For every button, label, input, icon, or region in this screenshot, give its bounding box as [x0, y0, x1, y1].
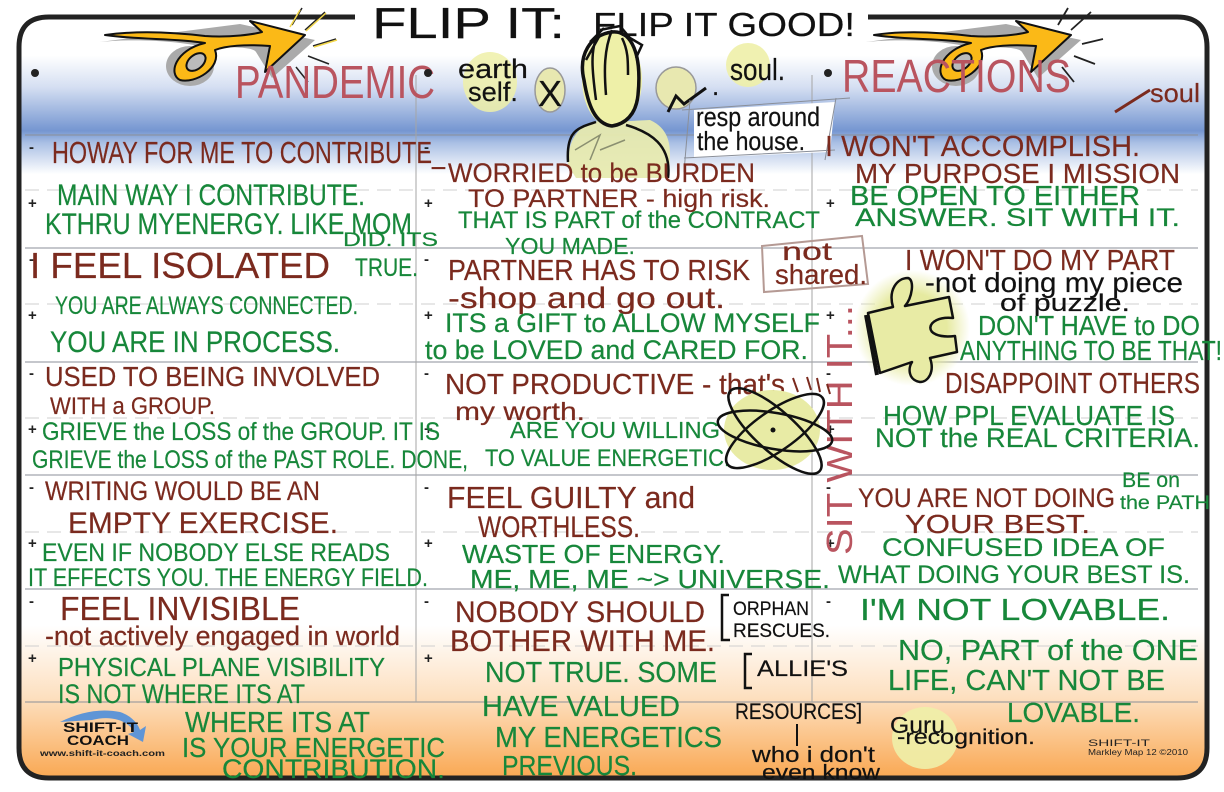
- credit: [1088, 738, 1189, 757]
- icon: puzzle piece: [854, 270, 970, 386]
- column two: middle notes: PREVIOUS.: [502, 750, 637, 781]
- column two: middle notes: ARE YOU WILLING: [510, 417, 720, 443]
- row markers: -: [826, 139, 831, 156]
- column two: middle notes: [425, 158, 830, 781]
- row markers: -: [424, 479, 429, 496]
- column two: middle notes: BOTHER WITH ME.: [450, 625, 715, 658]
- row markers: +: [28, 535, 37, 552]
- logo: shift-it coach: SHIFT-IT: [63, 719, 139, 735]
- column two: middle notes: YOU MADE.: [505, 233, 635, 259]
- column two: middle notes: TO PARTNER - high risk.: [468, 185, 770, 213]
- note: orphan rescues: [722, 595, 830, 642]
- icon: right yellow arrow: [866, 8, 1103, 86]
- note: guru recognition: -recognition.: [897, 726, 1035, 749]
- column one: pandemic notes: EVEN IF NOBODY ELSE READS: [42, 539, 390, 567]
- column one: pandemic notes: DID. ITS: [343, 230, 438, 251]
- note: rays above atom: [793, 377, 830, 394]
- column two: middle notes: -shop and go out.: [448, 282, 725, 315]
- column two: middle notes: NOT PRODUCTIVE - that's: [445, 369, 785, 401]
- column one: pandemic notes: IS YOUR ENERGETIC: [182, 732, 445, 763]
- column three: reactions notes: CONFUSED IDEA OF: [882, 534, 1165, 562]
- column one: pandemic notes: PHYSICAL PLANE VISIBILITY: [58, 652, 385, 682]
- column one: pandemic notes: WHERE ITS AT: [185, 707, 370, 739]
- column three: reactions notes: LIFE, CAN'T NOT BE: [888, 665, 1165, 697]
- note: resp around the house: [682, 98, 850, 172]
- row markers: +: [424, 421, 433, 438]
- title: FLIP IT GOOD!: [593, 6, 855, 43]
- row markers: -: [29, 251, 34, 268]
- column two: middle notes: NOBODY SHOULD: [455, 596, 705, 629]
- column three: reactions notes: the PATH: [1120, 493, 1210, 514]
- row markers: -: [424, 593, 429, 610]
- row markers: +: [424, 307, 433, 324]
- row markers: -: [826, 365, 831, 382]
- column two: middle notes: my worth.: [455, 398, 585, 426]
- column three: reactions notes: LOVABLE.: [1007, 697, 1140, 728]
- note: soul slash: [1115, 78, 1200, 112]
- row markers: -: [29, 593, 34, 610]
- column three: reactions notes: NO, PART of the ONE: [898, 635, 1198, 667]
- note: allies resources: RESOURCES]: [735, 699, 862, 724]
- row markers: -: [29, 139, 34, 156]
- column three: reactions notes: -not doing my piece: [925, 267, 1183, 298]
- note: guru recognition: [890, 707, 1035, 769]
- row markers: -: [424, 251, 429, 268]
- row markers: +: [424, 650, 433, 667]
- row markers: +: [424, 535, 433, 552]
- icon: left yellow arrow: [100, 8, 337, 86]
- row markers: +: [28, 307, 37, 324]
- column one: pandemic notes: WRITING WOULD BE AN: [45, 476, 320, 506]
- note: earth self: self.: [468, 77, 518, 107]
- column three: reactions notes: NOT the REAL CRITERIA.: [875, 423, 1200, 453]
- row markers: +: [28, 650, 37, 667]
- column three: reactions notes: I WON'T ACCOMPLISH.: [825, 131, 1140, 163]
- column one: pandemic notes: HOWAY FOR ME TO CONTRIBUTE_: [52, 135, 446, 170]
- column three: reactions notes: YOU ARE NOT DOING: [858, 483, 1115, 513]
- vertical note: sit with it: SIT WITH IT...: [819, 305, 860, 555]
- column three: reactions notes: BE on: [1122, 469, 1180, 492]
- row markers: -: [29, 365, 34, 382]
- note: soul check: [668, 52, 785, 112]
- column one: pandemic notes: [28, 135, 468, 784]
- column two: middle notes: to be LOVED and CARED FOR.: [425, 335, 808, 365]
- row markers: +: [826, 535, 835, 552]
- note: earth self: [458, 54, 562, 114]
- title: [372, 0, 855, 48]
- column one: pandemic notes: FEEL INVISIBLE: [60, 590, 300, 627]
- column bullets: [31, 69, 832, 77]
- column three: reactions notes: I'M NOT LOVABLE.: [860, 592, 1170, 627]
- note: earth self: earth: [458, 54, 528, 84]
- column two: middle notes: WORRIED to be BURDEN: [448, 158, 755, 188]
- note: guru recognition: Guru: [890, 712, 945, 738]
- row markers: -: [826, 593, 831, 610]
- note: not shared box: [762, 236, 868, 292]
- column one: pandemic notes: MAIN WAY I CONTRIBUTE.: [57, 179, 365, 212]
- column one: pandemic notes: -not actively engaged in world: [45, 621, 400, 651]
- column three: reactions notes: of puzzle.: [1000, 290, 1130, 317]
- row markers: +: [826, 307, 835, 324]
- column one: pandemic notes: USED TO BEING INVOLVED: [45, 361, 380, 392]
- credit: Markley Map 12 ©2010: [1088, 748, 1189, 757]
- icon: earth self and soul highlights: [463, 43, 770, 112]
- column one: pandemic notes: IT EFFECTS YOU. THE ENERGY FIELD.: [28, 564, 428, 592]
- row markers: -: [29, 479, 34, 496]
- column one: pandemic notes: EMPTY EXERCISE.: [68, 507, 338, 540]
- column two: middle notes: ITS a GIFT to ALLOW MYSELF: [445, 308, 820, 338]
- note: resp around the house: the house.: [697, 126, 805, 156]
- row markers: [28, 139, 835, 667]
- note: allies resources: ALLIE'S: [757, 656, 848, 681]
- column one: pandemic notes: GRIEVE the LOSS of the GROUP. IT IS: [42, 418, 440, 446]
- title: FLIP IT:: [372, 0, 565, 48]
- column two: middle notes: WORTHLESS.: [478, 511, 640, 544]
- column heading: pandemic: PANDEMIC: [235, 56, 435, 108]
- row markers: -: [826, 479, 831, 496]
- column three: reactions notes: HOW PPL EVALUATE IS: [883, 400, 1175, 431]
- row markers: +: [28, 195, 37, 212]
- column three: reactions notes: [825, 131, 1222, 728]
- column one: pandemic notes: I FEEL ISOLATED: [30, 245, 330, 286]
- logo: shift-it coach: COACH: [67, 732, 129, 748]
- note: earth self: X: [538, 73, 562, 114]
- icon: person figure: [568, 26, 670, 178]
- note: not shared box: not: [782, 238, 832, 266]
- logo: shift-it coach: [39, 710, 165, 758]
- logo: shift-it coach: www.shift-it-coach.com: [39, 749, 165, 758]
- row markers: -: [424, 139, 429, 156]
- column two: middle notes: WASTE OF ENERGY.: [462, 539, 725, 569]
- column two: middle notes: THAT IS PART of the CONTRACT: [458, 207, 820, 234]
- column three: reactions notes: BE OPEN TO EITHER: [850, 180, 1140, 211]
- column heading: reactions: REACTIONS: [842, 50, 1071, 102]
- note: soul slash: soul: [1150, 78, 1200, 108]
- column three: reactions notes: YOUR BEST.: [905, 509, 1090, 539]
- column three: reactions notes: WHAT DOING YOUR BEST IS.: [838, 561, 1190, 589]
- column one: pandemic notes: YOU ARE IN PROCESS.: [50, 326, 340, 359]
- column two: middle notes: NOT TRUE. SOME: [485, 657, 717, 689]
- column one: pandemic notes: CONTRIBUTION.: [222, 754, 445, 784]
- column one: pandemic notes: GRIEVE the LOSS of the PAST ROLE. DONE,: [32, 446, 468, 474]
- column two: middle notes: ME, ME, ME ~> UNIVERSE.: [470, 564, 830, 594]
- column three: reactions notes: I WON'T DO MY PART: [905, 245, 1175, 277]
- column three: reactions notes: DON'T HAVE to DO: [978, 310, 1200, 341]
- column one: pandemic notes: WITH a GROUP.: [50, 393, 215, 420]
- note: soul check: .: [712, 71, 719, 101]
- note: allies resources: even know: [762, 762, 881, 784]
- column one: pandemic notes: IS NOT WHERE ITS AT: [58, 679, 305, 709]
- column two: middle notes: HAVE VALUED: [482, 691, 680, 723]
- column two: middle notes: FEEL GUILTY and: [447, 480, 695, 515]
- note: soul check: soul.: [730, 52, 785, 87]
- column one: pandemic notes: KTHRU MYENERGY. LIKE MOM: [45, 208, 412, 241]
- icon: atom scribble: [715, 376, 835, 486]
- row markers: -: [424, 365, 429, 382]
- note: allies resources: [735, 654, 881, 784]
- note: not shared box: shared.: [775, 259, 867, 290]
- column one: pandemic notes: YOU ARE ALWAYS CONNECTED.: [55, 292, 358, 320]
- note: orphan rescues: RESCUES.: [733, 621, 830, 642]
- column two: middle notes: PARTNER HAS TO RISK: [448, 255, 751, 287]
- credit: SHIFT-IT: [1088, 738, 1151, 748]
- row markers: +: [424, 195, 433, 212]
- note: allies resources: who i don't: [751, 742, 875, 767]
- row markers: +: [826, 421, 835, 438]
- row markers: +: [826, 195, 835, 212]
- column three: reactions notes: ANSWER. SIT WITH IT.: [855, 204, 1180, 232]
- row markers: +: [28, 421, 37, 438]
- column two: middle notes: TO VALUE ENERGETIC.: [485, 445, 730, 472]
- note: orphan rescues: ORPHAN: [733, 599, 809, 620]
- column two: middle notes: MY ENERGETICS: [495, 722, 722, 754]
- column one: pandemic notes: TRUE.: [355, 254, 418, 282]
- column three: reactions notes: MY PURPOSE I MISSION: [855, 158, 1180, 189]
- note: resp around the house: resp around: [696, 102, 820, 132]
